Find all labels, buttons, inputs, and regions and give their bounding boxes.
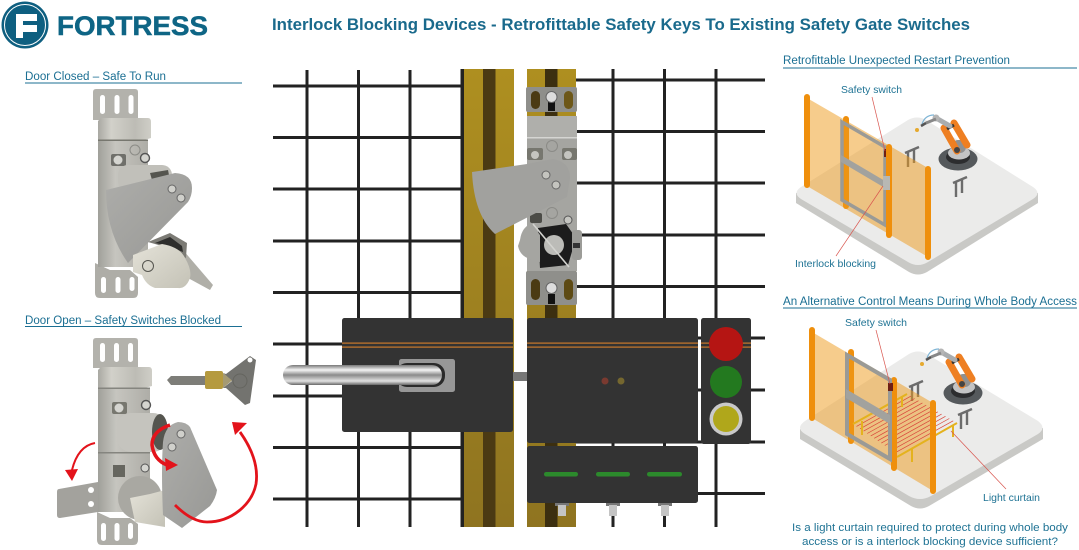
- title: Interlock Blocking Devices - Retrofittable Safety Keys To Existing Safety Gate Switches: [272, 16, 970, 34]
- diagram: restart prevention cell: [796, 97, 1038, 274]
- wire mesh fence: right: [576, 69, 765, 527]
- green button: [710, 366, 742, 398]
- label: interlock blocking: Interlock blocking: [795, 258, 876, 270]
- yellow post: right: [527, 69, 576, 527]
- label: light curtain: [951, 431, 1040, 504]
- logo: Fortress: FORTRESS: [57, 11, 208, 41]
- label: safety switch: Safety switch: [841, 84, 902, 96]
- connection module: [527, 446, 698, 516]
- label: safety switch 2: Safety switch: [845, 317, 907, 329]
- label: light curtain: Light curtain: [983, 492, 1040, 504]
- indicator LEDs: [602, 378, 624, 384]
- yellow button: [710, 402, 742, 436]
- label: interlock blocking: [795, 186, 883, 270]
- arrow: large flap rotation: [175, 422, 257, 522]
- control unit: lock side: [527, 318, 698, 443]
- heading: whole body access: An Alternative Control Means During Whole Body Access: [783, 296, 1077, 308]
- arrow: small left rotation: [65, 443, 95, 481]
- heading: door closed: Door Closed – Safe To Run: [25, 71, 166, 83]
- logo: Fortress: [2, 2, 208, 48]
- icon: safety key: [167, 356, 256, 405]
- question text: [792, 522, 1069, 548]
- diagram: light curtain cell: [800, 330, 1043, 508]
- emergency stop button: [709, 327, 743, 361]
- heading: door open: Door Open – Safety Switches Blocked: [25, 315, 221, 327]
- yellow post: left: [464, 69, 514, 527]
- question text: Is a light curtain required to protect during whole body: [792, 522, 1069, 534]
- question text: access or is a interlock blocking device sufficient?: [802, 536, 1058, 548]
- connecting bar between control units: [513, 372, 527, 381]
- device: door closed safety key: [93, 89, 213, 298]
- handle plate: [399, 359, 455, 392]
- wire mesh fence: left: [273, 69, 464, 527]
- label: safety switch 2: [845, 317, 907, 384]
- control unit: handle side: [283, 318, 513, 432]
- heading: restart prevention: Retrofittable Unexpected Restart Prevention: [783, 55, 1010, 67]
- device: door open safety key removed: [57, 338, 217, 545]
- label: safety switch: [841, 84, 902, 151]
- button panel: [701, 318, 751, 444]
- arrow: key rotation: [152, 425, 178, 471]
- device: safety key on gate: [472, 87, 582, 305]
- door handle: [283, 363, 445, 387]
